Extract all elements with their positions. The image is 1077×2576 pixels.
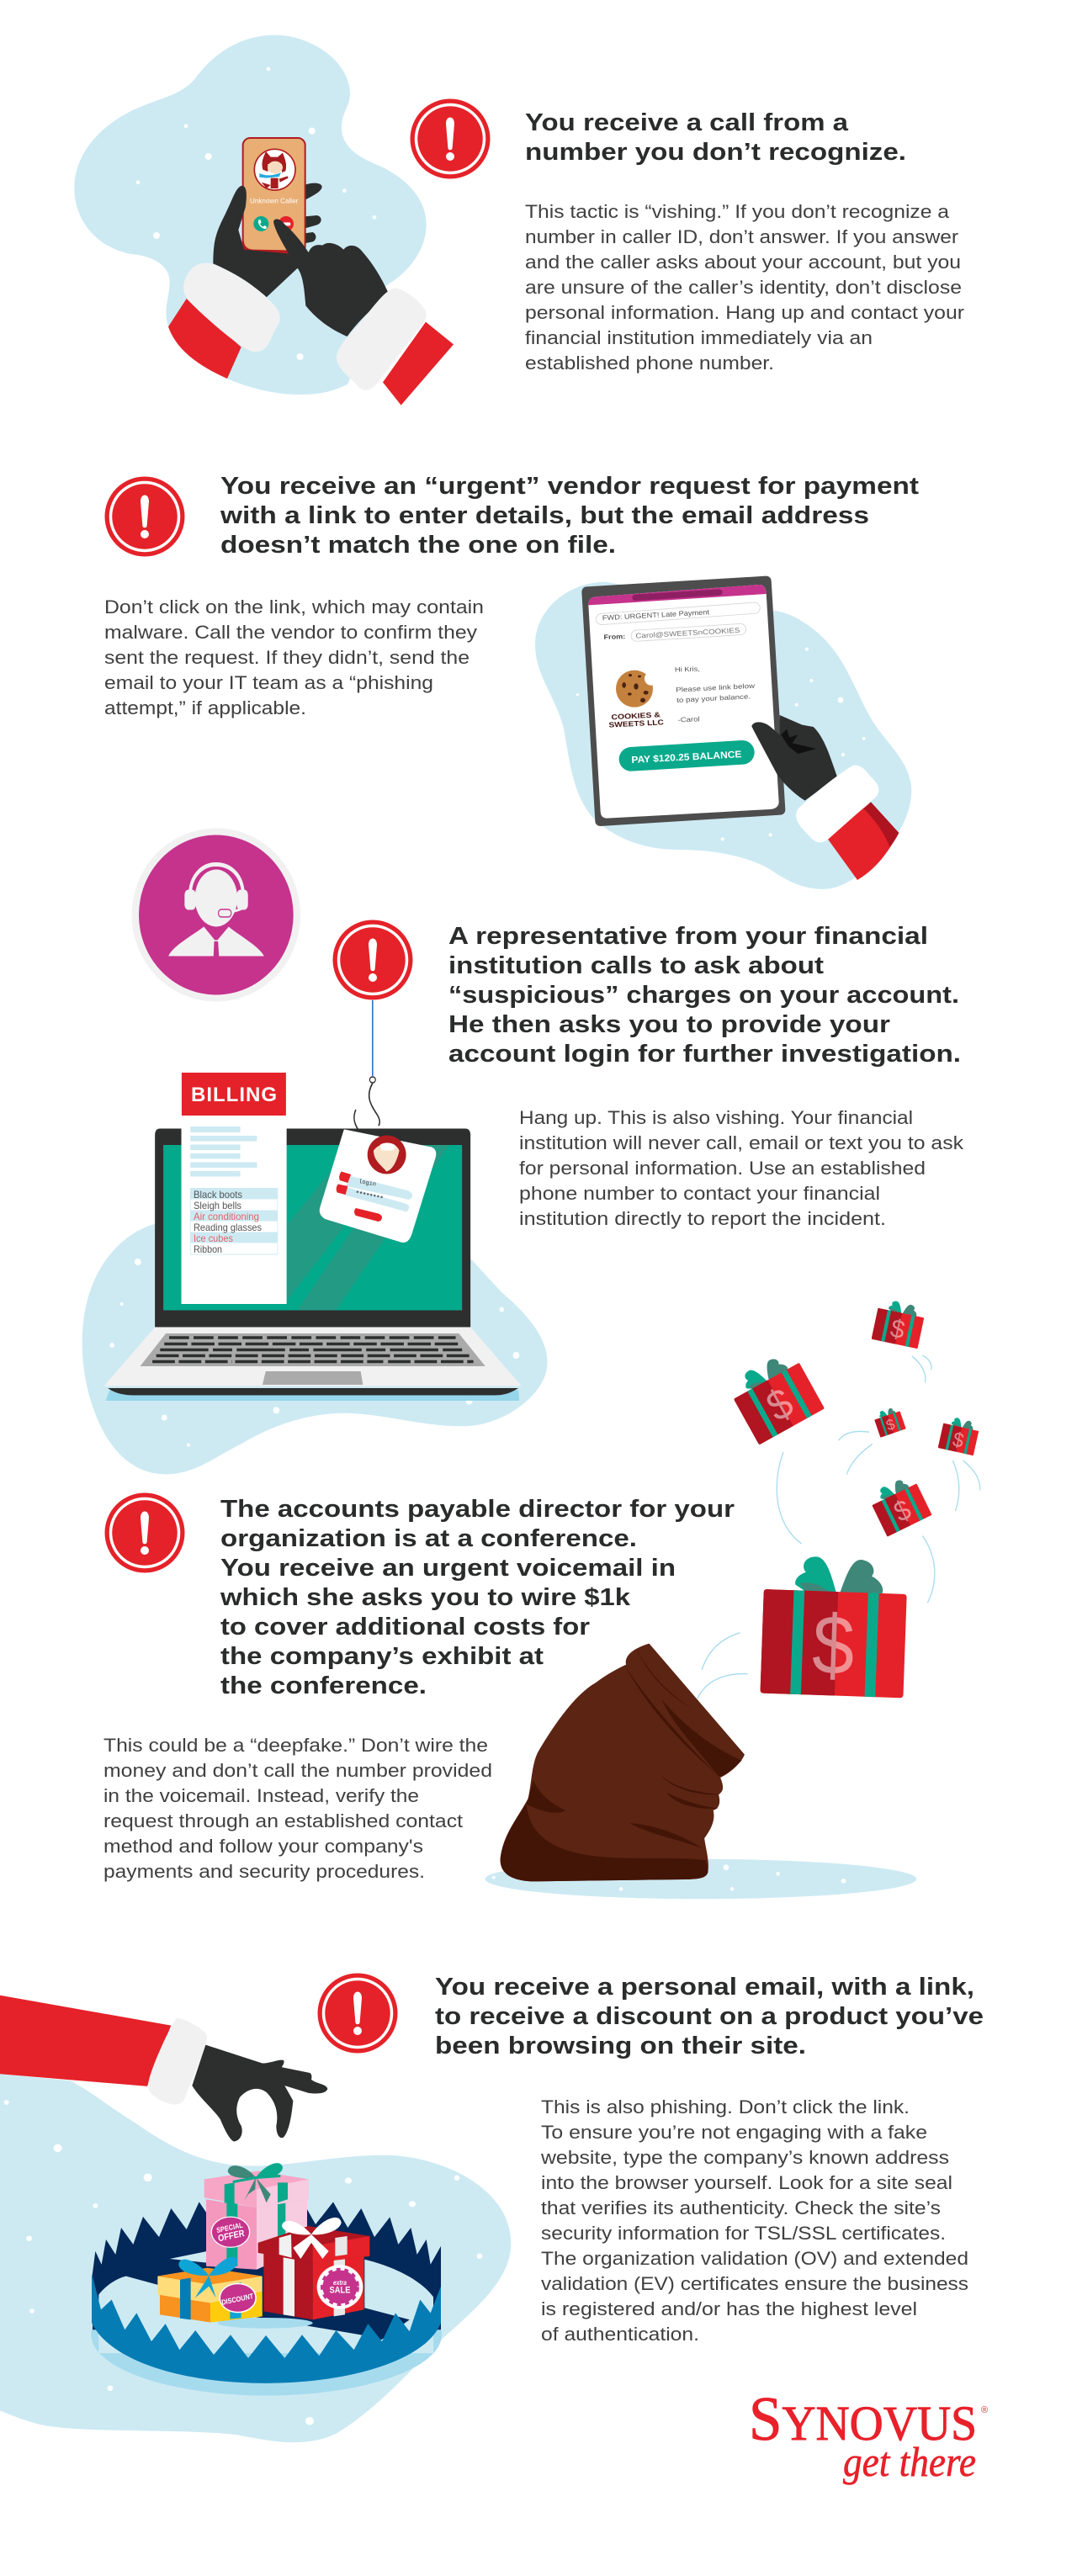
body text: into the browser yourself. Look for a site seal [541, 2172, 952, 2193]
body text: money and don’t call the number provided [103, 1760, 492, 1781]
badge: special offer: SPECIAL [216, 2221, 243, 2234]
icon: tablet [586, 581, 780, 821]
icon: tablet: Hi Kris, [675, 665, 700, 674]
icon: pointing hand [273, 219, 389, 337]
icon: alert badge [104, 476, 185, 557]
background blob [0, 2074, 511, 2442]
icon: small gift: $ [883, 1415, 897, 1434]
icon: laptop [104, 1129, 522, 1401]
icon: right cuff [337, 289, 427, 390]
badge: special offer: OFFER [217, 2229, 246, 2245]
icon: large gift [760, 1555, 908, 1698]
body text: validation (EV) certificates ensure the business [541, 2273, 968, 2294]
body text [525, 201, 964, 374]
icon: gift upper left [725, 1348, 825, 1444]
heading [220, 1496, 735, 1699]
icon: bear trap back jaw [91, 2202, 442, 2396]
icon: left cuff [183, 263, 280, 352]
icon: gift far right [938, 1415, 980, 1455]
badge: special offer [211, 2217, 250, 2248]
billing line items: Ice cubes [194, 1232, 233, 1244]
body text: This is also phishing. Don’t click the link. [541, 2096, 910, 2118]
icon: left sleeve [168, 299, 241, 379]
body text: of authentication. [541, 2324, 699, 2345]
icon: white cuff [796, 766, 878, 842]
body text: security information for TSL/SSL certificates. [541, 2223, 946, 2244]
icon: red sleeve [827, 802, 899, 880]
heading: The accounts payable director for your [220, 1496, 735, 1523]
icon: gift top right: $ [888, 1314, 908, 1345]
icon: alert badge [104, 1492, 185, 1573]
body text: is registered and/or has the highest level [541, 2298, 917, 2319]
billing label: BILLING [191, 1084, 277, 1106]
icon: gloved hand [751, 715, 837, 801]
panel: urgent vendor request scam [104, 473, 919, 889]
badge: extra sale: SALE [330, 2286, 351, 2296]
body text [103, 1735, 492, 1882]
icon: cookie [616, 671, 658, 708]
body text: Don’t click on the link, which may contain [104, 596, 484, 617]
heading: account login for further investigation. [448, 1041, 961, 1068]
badge: discount: DISCOUNT [221, 2292, 254, 2307]
heading [220, 473, 919, 559]
heading: which she asks you to wire $1k [220, 1584, 631, 1611]
heading: A representative from your financial [448, 923, 928, 950]
icon: gift lower right: $ [889, 1493, 915, 1528]
icon: small gift [873, 1405, 906, 1438]
icon: tablet: -Carol [677, 715, 700, 724]
illustration: gifts in a bear trap [0, 1996, 511, 2442]
body text: institution will never call, email or text you to ask [519, 1132, 964, 1153]
heading: doesn’t match the one on file. [220, 532, 616, 559]
body text: To ensure you’re not engaging with a fake [541, 2122, 927, 2143]
billing line items: Air conditioning [194, 1211, 259, 1222]
icon: white cuff [148, 2018, 207, 2104]
billing document [182, 1073, 287, 1304]
background blob [535, 582, 911, 889]
icon: alert badge [411, 99, 490, 178]
body text: phone number to contact your financial [519, 1183, 880, 1204]
icon: gloved hand [192, 2045, 327, 2141]
body text: are unsure of the caller’s identity, don’t disclose [525, 277, 962, 298]
heading: the company’s exhibit at [220, 1643, 544, 1670]
body text: attempt,” if applicable. [104, 697, 306, 718]
pay button: PAY $120.25 BALANCE [631, 750, 742, 766]
panel: unknown caller scam [74, 35, 964, 405]
icon: right sleeve [383, 322, 454, 405]
body text: The organization validation (OV) and extended [541, 2248, 968, 2269]
panel: fake bank representative scam [82, 828, 964, 1474]
body text: number in caller ID, don’t answer. If you answer [525, 226, 958, 247]
login field labels [354, 1179, 384, 1203]
heading: You receive a personal email, with a link, [435, 1974, 974, 2001]
icon: gift far right: $ [951, 1428, 966, 1452]
icon: bear trap front jaw [92, 2273, 441, 2383]
heading: number you don’t recognize. [525, 139, 906, 166]
icon: red sleeve [0, 1996, 171, 2086]
body text: in the voicemail. Instead, verify the [103, 1785, 419, 1806]
badge: extra sale: extra [333, 2278, 347, 2287]
icon: tablet: to pay your balance. [676, 692, 751, 704]
body text: This could be a “deepfake.” Don’t wire the [103, 1735, 488, 1756]
badge: extra sale [317, 2265, 363, 2309]
sack on snow [485, 1355, 980, 1899]
login field labels: login [358, 1179, 377, 1189]
body text: email to your IT team as a “phishing [104, 672, 433, 693]
illustration: gloved hands answering phone [74, 35, 454, 405]
motion arcs [698, 1355, 980, 1699]
heading: He then asks you to provide your [448, 1011, 890, 1038]
body text: payments and security procedures. [103, 1861, 425, 1882]
heading: to cover additional costs for [220, 1614, 590, 1640]
illustration: laptop phishing hook [82, 828, 548, 1474]
heading [448, 923, 961, 1068]
panel: discount email scam [0, 1974, 984, 2442]
illustration: money bag and flying gifts [485, 1298, 980, 1899]
heading [525, 109, 906, 166]
heading: organization is at a conference. [220, 1525, 637, 1552]
icon: alert badge [318, 1974, 397, 2053]
logo: Synovus get there: SYNOVUS [749, 2385, 977, 2454]
body text: This tactic is “vishing.” If you don’t recognize a [525, 201, 950, 222]
icon: tablet: From: [603, 633, 625, 641]
body text: method and follow your company's [103, 1836, 423, 1857]
icon: tablet: Carol@SWEETSnCOOKIES [635, 626, 740, 640]
body text: personal information. Hang up and contact your [525, 302, 964, 323]
icon: large gift: $ [811, 1598, 856, 1693]
badge: discount [219, 2283, 257, 2313]
logo: Synovus get there: ® [981, 2405, 988, 2415]
login field labels: ******** [354, 1190, 384, 1203]
billing line items [194, 1189, 262, 1255]
background blob [82, 1224, 548, 1474]
icon: tablet: Please use link below [676, 682, 756, 694]
body text: established phone number. [525, 352, 774, 374]
icon: support agent badge [132, 828, 300, 1001]
icon: alert badge [333, 920, 412, 999]
body text [519, 1107, 964, 1229]
heading: to receive a discount on a product you’ve [435, 2003, 984, 2030]
heading: institution calls to ask about [448, 952, 824, 979]
icon: tablet: COOKIES & [611, 710, 661, 721]
heading: the conference. [220, 1672, 427, 1699]
icon: gift upper left: $ [759, 1379, 801, 1431]
illustration: tablet with phishing email [535, 581, 911, 889]
body text [104, 596, 484, 718]
icon: tablet: FWD: URGENT! Late Payment [602, 607, 710, 622]
billing line items: Black boots [194, 1189, 242, 1201]
icon: red gift [258, 2218, 369, 2319]
icon: phone [242, 138, 305, 254]
billing line items: Sleigh bells [194, 1200, 241, 1211]
body text: for personal information. Use an established [519, 1158, 926, 1179]
body text: request through an established contact [103, 1810, 463, 1831]
heading: You receive an “urgent” vendor request for payment [220, 473, 919, 500]
body text: financial institution immediately via an [525, 327, 873, 348]
billing line items: Reading glasses [194, 1222, 262, 1233]
icon: pink gift [204, 2163, 309, 2270]
heading: been browsing on their site. [435, 2033, 806, 2059]
body text [540, 2096, 968, 2345]
heading: “suspicious” charges on your account. [448, 982, 959, 1009]
icon: tablet: SWEETS LLC [608, 718, 665, 729]
heading: You receive an urgent voicemail in [220, 1555, 676, 1582]
logo: Synovus get there: get there [843, 2438, 976, 2485]
body text: malware. Call the vendor to confirm they [104, 622, 477, 643]
login card shadow and card [321, 1131, 435, 1242]
panel: deepfake voicemail scam [103, 1298, 980, 1899]
icon: yellow gift [157, 2257, 263, 2323]
logo: Synovus get there [749, 2385, 988, 2485]
body text: Hang up. This is also vishing. Your financial [519, 1107, 913, 1128]
icon: gift lower right [867, 1473, 932, 1537]
icon: back fingers [305, 183, 322, 243]
heading [435, 1974, 984, 2059]
body text: website, type the company’s known address [540, 2147, 949, 2168]
icon: phone: Unknown Caller [250, 197, 299, 204]
heading: with a link to enter details, but the email address [220, 502, 869, 529]
body text: that verifies its authenticity. Check the site’s [541, 2197, 941, 2218]
icon: holding hand [213, 186, 298, 298]
body text: sent the request. If they didn’t, send the [104, 647, 470, 668]
body text: institution directly to report the incident. [519, 1208, 886, 1229]
icon: hook and line [354, 1000, 379, 1130]
billing line items: Ribbon [194, 1243, 222, 1255]
icon: gift top right [872, 1298, 926, 1349]
body text: and the caller asks about your account, but you [525, 252, 961, 273]
background blob [74, 35, 427, 395]
heading: You receive a call from a [525, 109, 849, 136]
